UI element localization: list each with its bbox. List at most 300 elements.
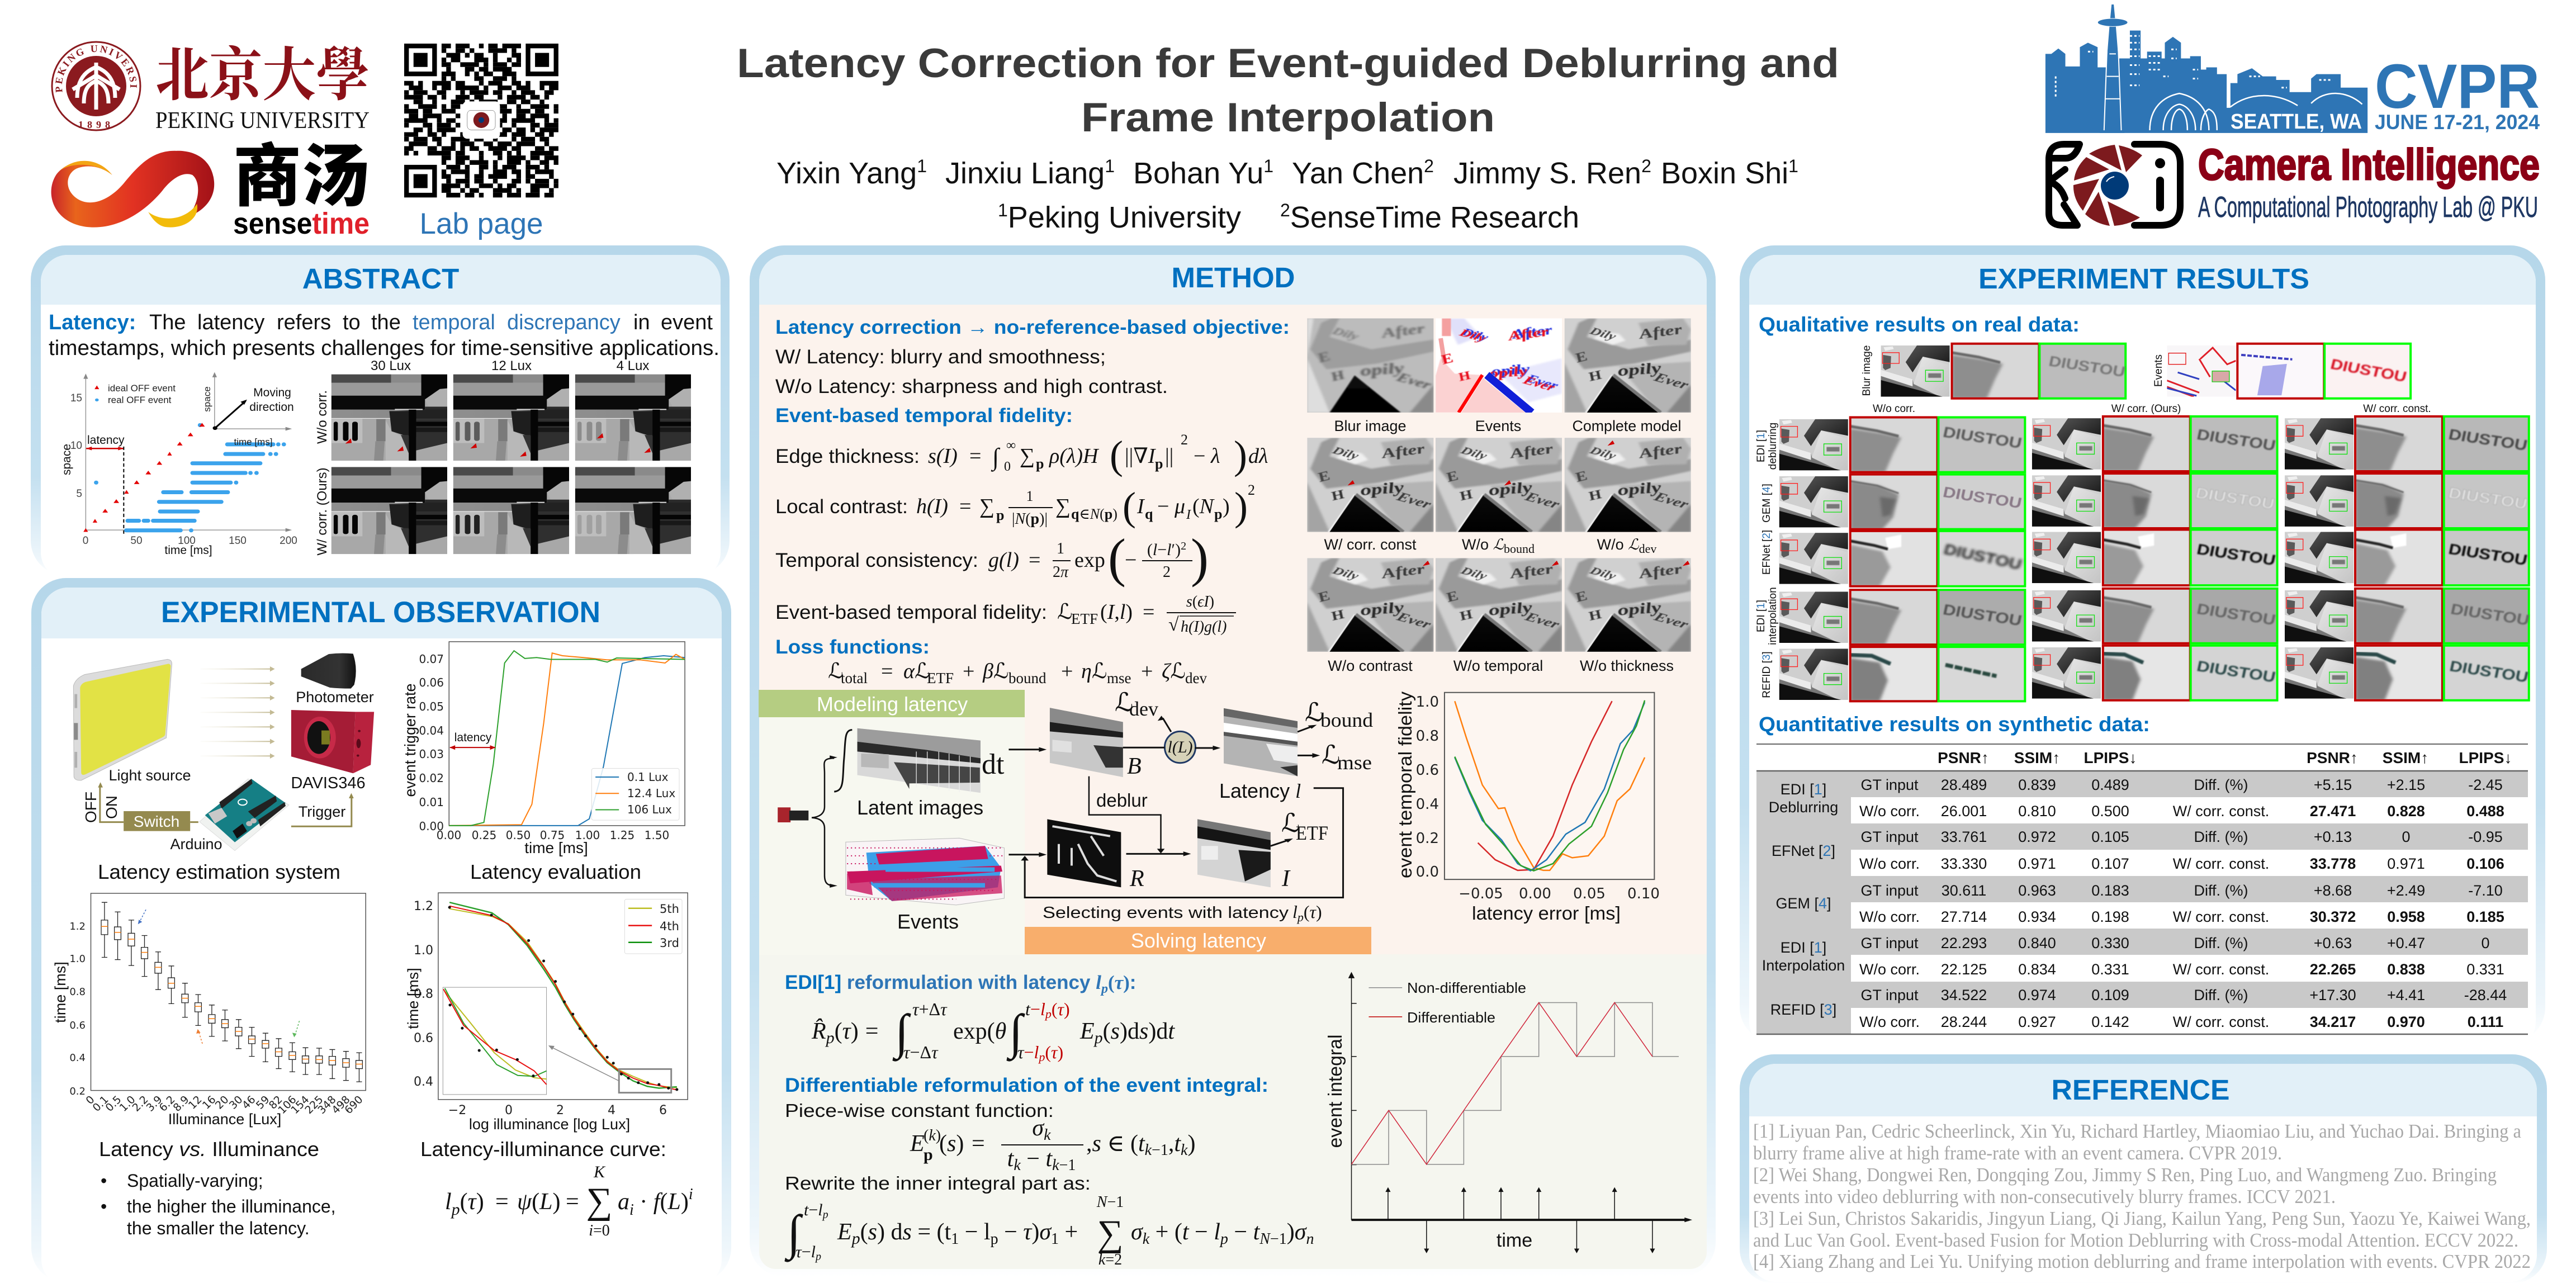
formula: rewritten inner integral: + ( bbox=[1149, 1219, 1182, 1245]
table rows: EFNet: 33.778 bbox=[2310, 855, 2356, 872]
chart: latency vs illuminance box plot: 1.0 bbox=[117, 1093, 138, 1114]
table rows: GEM: 0.185 bbox=[2466, 908, 2504, 925]
table rows: REFID: W/ corr. const. bbox=[2173, 1014, 2269, 1030]
diagram: latency modeling and solving pipeline bbox=[759, 688, 1373, 954]
chart: latency-illuminance curve: 6 bbox=[659, 1104, 667, 1117]
image grid: method comparison crops: DIUSTOU bbox=[1942, 424, 2023, 452]
table method column: Deblurring bbox=[1769, 799, 1838, 816]
formula: rewritten inner integral: p bbox=[815, 1251, 821, 1263]
diagram: latency modeling and solving pipeline: Latent images bbox=[857, 796, 983, 819]
chart: event temporal fidelity vs latency error: 0.6 bbox=[1416, 762, 1439, 779]
formula: event-based temporal fidelity: h(I)g(l) bbox=[1181, 618, 1227, 636]
chart: latency evaluation: 1.50 bbox=[645, 828, 669, 842]
heading: reference: REFERENCE bbox=[2052, 1074, 2229, 1106]
formula: edge thickness: s(I) bbox=[928, 444, 958, 468]
formula: local contrast: p bbox=[1214, 506, 1222, 522]
diagram: latency modeling and solving pipeline: l bbox=[1292, 902, 1298, 922]
formula: edge thickness: || bbox=[1165, 444, 1173, 468]
formula: local contrast: − μ bbox=[1157, 495, 1185, 518]
image grid: latency photos at three illuminance levels: W/ corr. (Ours) bbox=[315, 467, 330, 556]
text: latency definition: the bbox=[371, 311, 401, 334]
chart: event temporal fidelity vs latency error: 0.0 bbox=[1416, 864, 1439, 880]
chart: latency-illuminance curve: 5th bbox=[660, 902, 679, 916]
chart: latency vs illuminance box plot: 0.8 bbox=[69, 986, 86, 998]
header: Peking University logo bbox=[51, 28, 370, 134]
formula: piece-wise constant: k bbox=[1052, 1157, 1059, 1174]
label: solving latency bbox=[1025, 927, 1371, 954]
text: latency definition: timestamps, which presents challenges for time-sensitive applications. bbox=[49, 337, 719, 360]
formula: piece-wise constant: k bbox=[1014, 1157, 1021, 1174]
formula: rewritten inner integral: ∫ bbox=[784, 1206, 803, 1262]
image grid: method comparison crops: DIUSTOU bbox=[2447, 485, 2528, 513]
authors: Yan Chen bbox=[1292, 157, 1424, 190]
chart: latency vs illuminance box plot: 1.2 bbox=[69, 921, 86, 932]
affiliations: SenseTime Research bbox=[1290, 201, 1579, 234]
chart: latency evaluation: 1.25 bbox=[610, 828, 634, 842]
table rows: EDI interpolation: W/ corr. const. bbox=[2173, 961, 2269, 978]
formula: latency-illuminance polynomial: i=0 bbox=[589, 1222, 610, 1239]
text: latency definition: to bbox=[343, 311, 361, 334]
formula: local contrast: = bbox=[959, 495, 971, 518]
diagram: latency modeling and solving pipeline: ℒ bbox=[1305, 698, 1323, 727]
formula: EDI reformulation bbox=[811, 999, 1175, 1064]
image grid: method comparison crops: DIUSTOU bbox=[2195, 601, 2277, 628]
chart: latency evaluation: 1.00 bbox=[575, 828, 600, 842]
formula: piece-wise constant: , bbox=[1168, 1131, 1174, 1157]
table rows: EDI interpolation: 22.265 bbox=[2310, 961, 2356, 978]
affiliations: Peking University bbox=[1008, 201, 1241, 234]
formula: total loss: + bbox=[1141, 660, 1153, 683]
formula: piece-wise constant: (s) bbox=[939, 1131, 964, 1157]
wordmark: Peking University English: PEKING UNIVERSITY bbox=[155, 108, 370, 134]
diagram: latency estimation system: ON bbox=[103, 795, 120, 819]
chart: latency-illuminance curve: 2 bbox=[556, 1104, 564, 1117]
table rows: EDI deblurring: 0.489 bbox=[2091, 776, 2129, 793]
bullet list: observations: Spatially-varying; bbox=[127, 1171, 263, 1191]
formula: local contrast: ∑ bbox=[979, 495, 995, 518]
affiliations: 2 bbox=[1280, 200, 1290, 220]
chart: latency-illuminance curve: 0.8 bbox=[414, 987, 433, 1001]
table rows: EDI deblurring: +5.15 bbox=[2314, 776, 2352, 793]
formula: total loss: ηℒ bbox=[1081, 660, 1107, 683]
formula: local contrast: ) bbox=[1223, 495, 1230, 518]
chart: ideal vs real event timeline: 100 bbox=[178, 535, 196, 547]
chart: latency-illuminance curve: 0 bbox=[505, 1104, 513, 1117]
image grid: method comparison crops: DIUSTOU bbox=[2449, 602, 2531, 629]
table rows: EDI interpolation: 0.331 bbox=[2466, 961, 2504, 978]
formula: rewritten inner integral: t bbox=[1253, 1219, 1261, 1245]
formula: total loss: αℒ bbox=[903, 660, 930, 683]
table header: PSNR↑ bbox=[2307, 749, 2358, 766]
image grid: ablation results: W/o ℒ bbox=[1597, 536, 1639, 553]
formula: latency-illuminance polynomial: · bbox=[634, 1189, 654, 1215]
formula: latency-illuminance polynomial: K bbox=[593, 1163, 606, 1181]
formula: latency-illuminance polynomial bbox=[445, 1163, 693, 1239]
image grid: method comparison crops: DIUSTOU bbox=[1942, 542, 2024, 573]
formula: latency-illuminance polynomial: = bbox=[495, 1189, 509, 1215]
table rows: EFNet: W/o corr. bbox=[1859, 855, 1920, 872]
chart: event integral step function: event integral bbox=[1325, 1034, 1346, 1148]
formula: edge thickness: Edge thickness: bbox=[775, 446, 920, 467]
icon: Peking University seal bbox=[51, 41, 141, 131]
QR code bbox=[404, 44, 558, 197]
formula: EDI reformulation: ∫ bbox=[1006, 1005, 1025, 1062]
table rows: EDI interpolation: 0.834 bbox=[2018, 961, 2056, 978]
formula: temporal consistency: ( bbox=[1108, 528, 1126, 588]
formula: piece-wise constant: ) bbox=[1187, 1131, 1195, 1157]
heading: experiment results: EXPERIMENT RESULTS bbox=[1978, 263, 2309, 295]
table rows: GEM: 0.958 bbox=[2387, 908, 2425, 925]
panel: experimental observation bbox=[31, 578, 731, 1286]
chart: latency vs illuminance box plot: 59 bbox=[254, 1093, 272, 1112]
chart: latency evaluation: 0.07 bbox=[419, 652, 444, 666]
chart: latency evaluation: 0.00 bbox=[419, 820, 444, 833]
row labels: EDI [1] bbox=[1755, 600, 1767, 632]
formula: temporal consistency bbox=[775, 528, 1209, 588]
chart: latency vs illuminance box plot: 12 bbox=[186, 1093, 205, 1112]
formula: piece-wise constant: t bbox=[1174, 1131, 1181, 1157]
table rows: EFNet: +0.13 bbox=[2314, 828, 2352, 845]
chart: latency-illuminance curve: log illuminance [log Lux] bbox=[469, 1116, 630, 1133]
table rows: GEM: 30.611 bbox=[1942, 882, 1986, 899]
bullet list: observations bbox=[101, 1171, 336, 1238]
formula: total loss: mse bbox=[1107, 670, 1131, 686]
formula: edge thickness: ( bbox=[1110, 433, 1123, 477]
table rows: EFNet: GT input bbox=[1860, 828, 1919, 845]
chart: latency evaluation: 0.02 bbox=[419, 771, 444, 785]
formula: local contrast: 2 bbox=[1248, 482, 1255, 498]
diagram: latency modeling and solving pipeline: R bbox=[1129, 866, 1144, 892]
chart: latency evaluation: 12.4 Lux bbox=[627, 787, 675, 800]
text: latency definition: Latency: bbox=[49, 311, 136, 334]
table rows: REFID: +4.41 bbox=[2387, 987, 2425, 1003]
image grid: method comparison crops: DIUSTOU bbox=[2195, 541, 2277, 569]
diagram: latency modeling and solving pipeline: Latency l bbox=[1219, 779, 1301, 802]
chart: latency evaluation: 0.06 bbox=[419, 676, 444, 689]
diagram: latency modeling and solving pipeline: Events bbox=[897, 910, 959, 933]
image group: blur image and events input bbox=[1861, 344, 2411, 399]
image grid: ablation results: W/ corr. const bbox=[1324, 536, 1417, 553]
chart: latency evaluation: 0.00 bbox=[437, 828, 461, 842]
table rows: EFNet: 0.106 bbox=[2466, 855, 2504, 872]
formula: edge thickness: p bbox=[1036, 456, 1044, 472]
chart: ideal vs real event timeline: space bbox=[60, 444, 73, 475]
table rows: GEM: W/ corr. const. bbox=[2173, 908, 2269, 925]
diagram: latency modeling and solving pipeline: ℒ bbox=[1115, 688, 1133, 717]
label: solving latency: Solving latency bbox=[1131, 929, 1266, 952]
table rows: EDI interpolation bbox=[1859, 935, 2504, 978]
text: latency definition: temporal bbox=[413, 311, 495, 334]
diagram: latency modeling and solving pipeline: Selecting events with latency bbox=[1043, 904, 1289, 922]
table rows: REFID: -28.44 bbox=[2464, 987, 2507, 1003]
chart: latency evaluation: 0.05 bbox=[419, 700, 444, 713]
formula: rewritten inner integral: − bbox=[1228, 1219, 1253, 1245]
chart: latency vs illuminance box plot: 348 bbox=[315, 1093, 339, 1116]
table rows: EDI deblurring: Diff. (%) bbox=[2194, 776, 2248, 793]
formula: EDI reformulation: R̂ bbox=[812, 1019, 826, 1044]
table method column: EFNet [2] bbox=[1772, 842, 1835, 859]
formula: latency-illuminance polynomial: i bbox=[629, 1201, 634, 1219]
icon: Peking University seal: 1898 bbox=[78, 119, 114, 130]
table rows: GEM: +2.49 bbox=[2387, 882, 2425, 899]
formula: EDI reformulation: τ) = bbox=[842, 1019, 878, 1044]
chart: event temporal fidelity vs latency error: 0.8 bbox=[1416, 728, 1439, 745]
authors: Jimmy S. Ren bbox=[1453, 157, 1641, 190]
row labels: interpolation bbox=[1767, 587, 1779, 645]
bullet list: observations: the higher the illuminance, bbox=[127, 1196, 336, 1216]
formula: local contrast: ∑ bbox=[1055, 495, 1071, 518]
table rows: EFNet: 0.971 bbox=[2387, 855, 2425, 872]
formula: event-based temporal fidelity: ETF bbox=[1071, 610, 1098, 627]
formula: EDI reformulation: ( bbox=[1045, 1042, 1051, 1062]
text: rewrite inner integral: Rewrite the inner integral part as: bbox=[785, 1173, 1091, 1194]
formula: EDI reformulation: p bbox=[825, 1029, 835, 1047]
table rows: EDI deblurring: +2.15 bbox=[2387, 776, 2425, 793]
formula: rewritten inner integral: + bbox=[1059, 1219, 1078, 1245]
formula: event-based temporal fidelity: ℒ bbox=[1057, 600, 1072, 624]
formula: local contrast: q∈N(p) bbox=[1071, 506, 1117, 522]
formula: edge thickness: ) bbox=[1234, 433, 1247, 477]
image grid: method comparison crops: DIUSTOU bbox=[2195, 427, 2277, 454]
chart: latency-illuminance curve: 1.0 bbox=[414, 944, 433, 958]
formula: temporal consistency: (l−l′) bbox=[1147, 541, 1181, 559]
table rows: EDI deblurring: 0.488 bbox=[2466, 803, 2504, 820]
chart: latency evaluation: 0.75 bbox=[540, 828, 565, 842]
image grid: method comparison crops: DIUSTOU bbox=[1942, 602, 2023, 629]
authors: 2 bbox=[1424, 156, 1434, 176]
diagram: latency estimation system bbox=[73, 653, 374, 853]
chart: ideal vs real event timeline: 50 bbox=[130, 535, 143, 547]
formula: latency-illuminance polynomial: p bbox=[451, 1200, 460, 1219]
image grid: method comparison crops: DIUSTOU bbox=[1942, 484, 2023, 512]
table rows: EFNet: 33.761 bbox=[1941, 828, 1987, 845]
table rows: EDI deblurring: 0.810 bbox=[2018, 803, 2056, 820]
chart: event integral step function: time bbox=[1497, 1230, 1532, 1251]
formula: edge thickness: ∑ bbox=[1020, 444, 1035, 468]
formula: local contrast: I bbox=[1186, 508, 1191, 522]
table rows: REFID: 0.109 bbox=[2091, 987, 2129, 1003]
formula: rewritten inner integral: s) ds = (t bbox=[868, 1219, 951, 1245]
reference list: and Luc Van Gool. Event-based Fusion for Motion Deblurring with Cross-modal Attention. ECCV 2022. bbox=[1753, 1229, 2518, 1251]
caption: latency-illuminance curve: Latency-illuminance curve: bbox=[420, 1138, 666, 1161]
chart: latency-illuminance curve: time [ms] bbox=[405, 968, 422, 1029]
chart: ideal vs real event timeline: 150 bbox=[229, 535, 247, 547]
chart: event temporal fidelity vs latency error bbox=[1395, 691, 1660, 924]
table method column: EDI [1] bbox=[1781, 781, 1826, 798]
heading: abstract: ABSTRACT bbox=[302, 263, 459, 295]
formula: EDI reformulation: ( bbox=[835, 1019, 842, 1044]
formula: local contrast: p bbox=[996, 507, 1004, 523]
table rows: EDI interpolation: +0.63 bbox=[2314, 935, 2352, 951]
formula: EDI reformulation: τ−Δτ bbox=[903, 1042, 939, 1062]
reference list: blurry frame alive at high frame-rate with an event camera. CVPR 2019. bbox=[1753, 1142, 2282, 1164]
formula: event-based temporal fidelity: = bbox=[1143, 600, 1154, 624]
row labels: EDI [1] bbox=[1755, 430, 1767, 462]
table method column: GEM [4] bbox=[1775, 895, 1831, 912]
formula: edge thickness: − λ bbox=[1194, 444, 1220, 468]
image group: blur image and events input: DIUSTOU bbox=[2047, 353, 2127, 380]
image grid: ablation results: W/o contrast bbox=[1328, 657, 1413, 674]
formula: piece-wise constant: −1 bbox=[1152, 1142, 1168, 1159]
table method column: EDI [1] bbox=[1781, 939, 1826, 956]
chart: ideal vs real event timeline: time [ms] bbox=[164, 544, 212, 557]
formula: latency-illuminance polynomial: ( bbox=[460, 1189, 468, 1215]
table rows: EFNet: 33.330 bbox=[1941, 855, 1987, 872]
table rows: GEM bbox=[1859, 882, 2504, 925]
formula: local contrast: h(I) bbox=[916, 495, 948, 518]
table rows: EDI deblurring: GT input bbox=[1860, 776, 1919, 793]
formula: temporal consistency: exp bbox=[1074, 548, 1105, 572]
formula: total loss: dev bbox=[1185, 670, 1207, 686]
subheading: EDI reformulation: ( bbox=[1108, 972, 1115, 993]
row labels: deblurring bbox=[1767, 423, 1779, 470]
formula: latency-illuminance polynomial: i bbox=[689, 1186, 693, 1203]
table rows: EFNet: 0 bbox=[2402, 828, 2411, 845]
table rows: EDI deblurring bbox=[1859, 776, 2504, 820]
text: latency definition bbox=[49, 311, 719, 360]
text: latency definition: discrepancy bbox=[507, 311, 621, 334]
panel: experiment results bbox=[1740, 245, 2545, 1049]
formula: latency-illuminance polynomial: f(L) bbox=[654, 1189, 689, 1215]
diagram: latency modeling and solving pipeline: ℒ bbox=[1281, 809, 1300, 837]
formula: rewritten inner integral: p bbox=[851, 1229, 860, 1248]
chart: latency-illuminance curve: 4 bbox=[608, 1104, 615, 1117]
formula: temporal consistency: − bbox=[1125, 548, 1137, 572]
text: latency definition: event bbox=[661, 311, 713, 334]
subheading: EDI reformulation: τ): bbox=[1115, 972, 1136, 993]
formula: edge thickness: dλ bbox=[1248, 444, 1268, 468]
formula: local contrast: |N(p)| bbox=[1012, 510, 1048, 528]
table rows: EDI interpolation: 0 bbox=[2481, 935, 2490, 951]
row labels bbox=[1755, 423, 1779, 698]
formula: latency-illuminance polynomial: τ) bbox=[468, 1189, 484, 1215]
chart: latency evaluation: event trigger rate bbox=[401, 683, 419, 797]
column labels: W/ corr. (Ours) bbox=[2111, 403, 2181, 415]
formula: latency-illuminance polynomial: ∑ bbox=[586, 1181, 613, 1221]
authors: 1 bbox=[917, 156, 927, 176]
chart: latency vs illuminance box plot: 8.9 bbox=[171, 1093, 192, 1114]
chart: latency vs illuminance box plot bbox=[52, 893, 366, 1128]
chart: latency vs illuminance box plot: 0.6 bbox=[69, 1020, 86, 1031]
subheading: quantitative results: Quantitative results on synthetic data: bbox=[1759, 713, 2150, 736]
formula: total loss: + bbox=[963, 660, 974, 683]
formula: local contrast: q bbox=[1145, 506, 1153, 522]
chart: ideal vs real event timeline: direction bbox=[249, 401, 294, 414]
chart: latency vs illuminance box plot: 690 bbox=[342, 1093, 366, 1116]
chart: event temporal fidelity vs latency error: latency error [ms] bbox=[1472, 903, 1621, 924]
chart: latency vs illuminance box plot: 106 bbox=[276, 1093, 299, 1116]
text: latency definition: The bbox=[149, 311, 186, 334]
formula: rewritten inner integral: σ bbox=[1131, 1219, 1144, 1245]
formula: event-based temporal fidelity: (I,l) bbox=[1100, 600, 1133, 624]
image grid: ablation results: Blur image bbox=[1334, 418, 1407, 434]
text: latency correction objective: Latency correction → no-reference-based objective: bbox=[775, 316, 1290, 338]
table method column bbox=[1762, 781, 1845, 1018]
chart: latency vs illuminance box plot: 154 bbox=[288, 1093, 312, 1116]
table rows: REFID: +17.30 bbox=[2309, 987, 2356, 1003]
diagram: latency modeling and solving pipeline: l(L) bbox=[1167, 738, 1193, 756]
formula: temporal consistency: g(l) bbox=[988, 548, 1019, 572]
chart: event temporal fidelity vs latency error: 0.00 bbox=[1519, 886, 1551, 902]
formula: rewritten inner integral: 1 bbox=[951, 1230, 959, 1248]
formula: edge thickness: 2 bbox=[1181, 432, 1188, 448]
diagram: latency modeling and solving pipeline: p bbox=[1296, 910, 1304, 924]
table header: SSIM↑ bbox=[2383, 749, 2428, 766]
formula: rewritten inner integral: t−l bbox=[804, 1201, 823, 1219]
text: latency definition: in bbox=[633, 311, 650, 334]
formula: rewritten inner integral: k=2 bbox=[1098, 1251, 1122, 1268]
chart: event temporal fidelity vs latency error: event temporal fidelity bbox=[1395, 691, 1415, 878]
formula: rewritten inner integral: p bbox=[1219, 1230, 1228, 1248]
table rows: REFID: 0.927 bbox=[2018, 1014, 2056, 1030]
table header: LPIPS↓ bbox=[2084, 749, 2137, 766]
formula: rewritten inner integral: N−1 bbox=[1096, 1194, 1124, 1211]
table: quantitative results bbox=[1756, 744, 2528, 1034]
formula: rewritten inner integral: p bbox=[822, 1209, 828, 1221]
Camera Intelligence logo bbox=[2049, 140, 2540, 226]
chart: ideal vs real event timeline: 0 bbox=[83, 535, 88, 547]
chart: latency-illuminance curve bbox=[405, 893, 688, 1133]
formula: EDI reformulation: exp(θ bbox=[953, 1019, 1006, 1044]
title: Frame Interpolation bbox=[1081, 95, 1495, 140]
authors: Jinxiu Liang bbox=[945, 157, 1105, 190]
authors bbox=[776, 156, 1798, 190]
table rows: EDI interpolation: 0.840 bbox=[2018, 935, 2056, 951]
formula: piece-wise constant: = bbox=[972, 1131, 985, 1157]
reference list: [2] Wei Shang, Dongwei Ren, Dongqing Zou, Jimmy S Ren, Ping Luo, and Wangmeng Zuo. Bringing bbox=[1753, 1164, 2497, 1186]
formula: EDI reformulation: t−l bbox=[1025, 999, 1045, 1019]
formula: rewritten inner integral: n bbox=[1306, 1230, 1314, 1248]
image grid: ablation results: Complete model bbox=[1572, 418, 1682, 434]
formula: total loss: βℒ bbox=[982, 660, 1008, 683]
text: latency correction objective: W/o Latency: sharpness and high contrast. bbox=[775, 376, 1168, 397]
image grid: method comparison crops: DIUSTOU bbox=[2195, 658, 2277, 686]
table rows: REFID: 0.974 bbox=[2018, 987, 2056, 1003]
panel: method bbox=[750, 245, 1716, 1277]
chart: latency evaluation: 0.50 bbox=[506, 828, 531, 842]
table header: PSNR↑ bbox=[1938, 749, 1989, 766]
table rows: GEM: 27.714 bbox=[1941, 908, 1987, 925]
table rows: EFNet: 0.107 bbox=[2091, 855, 2129, 872]
formula: EDI reformulation: E bbox=[1079, 1019, 1095, 1044]
chart: ideal vs real event timeline: 10 bbox=[70, 440, 82, 452]
wordmark: SenseTime Chinese: 商汤 bbox=[233, 121, 370, 220]
table rows: GEM: -7.10 bbox=[2468, 882, 2503, 899]
reference list: [3] Lei Sun, Christos Sakaridis, Jingyun Liang, Qi Jiang, Kailun Yang, Peng Sun, Yaozu Ye, Kaiwei Wang, bbox=[1753, 1208, 2531, 1229]
table rows: EDI deblurring: 27.471 bbox=[2310, 803, 2356, 820]
chart: event temporal fidelity vs latency error: 0.2 bbox=[1416, 830, 1439, 847]
formula: EDI reformulation: τ) bbox=[1051, 1042, 1063, 1062]
formula: piece-wise constant: t bbox=[1045, 1146, 1053, 1172]
chart: ideal vs real event timeline: 200 bbox=[280, 535, 297, 547]
formula: piece-wise constant: − bbox=[1021, 1146, 1045, 1172]
table rows: REFID: 0.142 bbox=[2091, 1014, 2129, 1030]
table rows: GEM: 0.183 bbox=[2091, 882, 2129, 899]
formula: edge thickness: p bbox=[1155, 456, 1163, 472]
chart: latency-illuminance curve: −2 bbox=[448, 1104, 466, 1117]
image grid: ablation results: Events bbox=[1475, 418, 1521, 434]
Lab page label: Lab page bbox=[419, 207, 543, 240]
panel: abstract bbox=[31, 245, 730, 579]
label: Seattle: SEATTLE, WA bbox=[2231, 110, 2362, 134]
formula: edge thickness: 0 bbox=[1004, 460, 1011, 474]
diagram: latency estimation system: Photometer bbox=[296, 689, 374, 705]
column labels: W/ corr. const. bbox=[2363, 403, 2431, 415]
image grid: ablation results: W/o thickness bbox=[1580, 657, 1674, 674]
formula: rewritten inner integral: − bbox=[998, 1219, 1023, 1245]
image grid: latency photos at three illuminance levels bbox=[315, 358, 691, 556]
table rows: EFNet bbox=[1859, 828, 2504, 872]
